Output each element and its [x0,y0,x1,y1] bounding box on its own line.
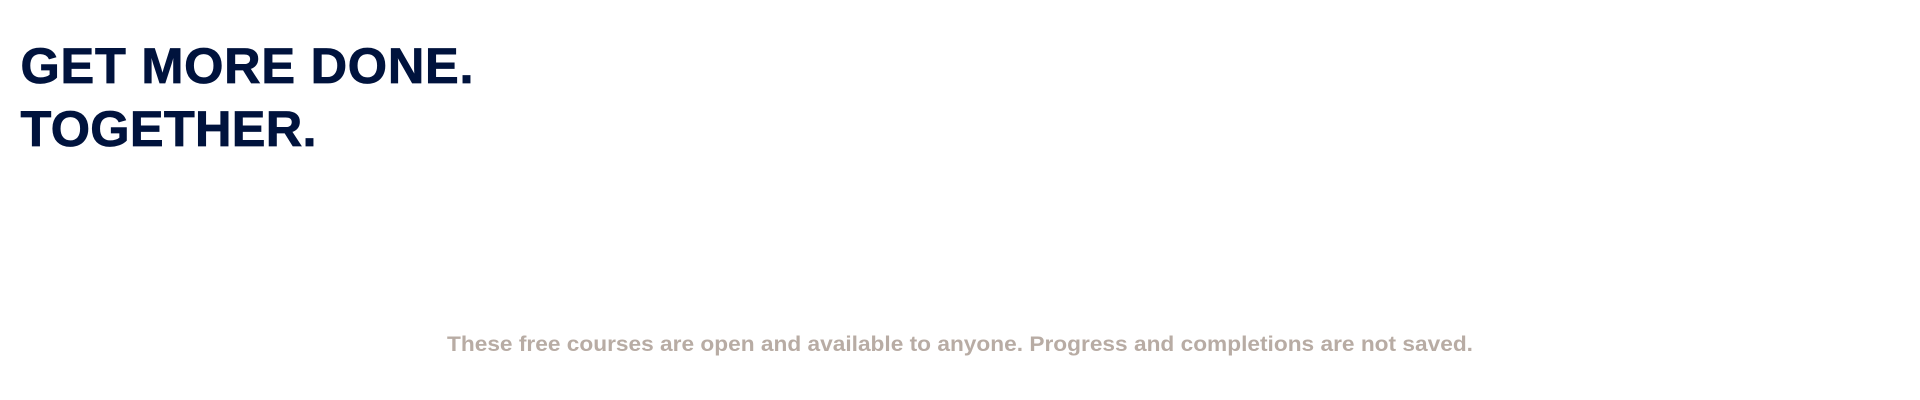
title [20,37,474,157]
title: GET MORE DONE. [20,37,474,94]
title: TOGETHER. [20,100,316,157]
disclaimer note: These free courses are open and available to anyone. Progress and completions are not saved. [447,332,1473,356]
